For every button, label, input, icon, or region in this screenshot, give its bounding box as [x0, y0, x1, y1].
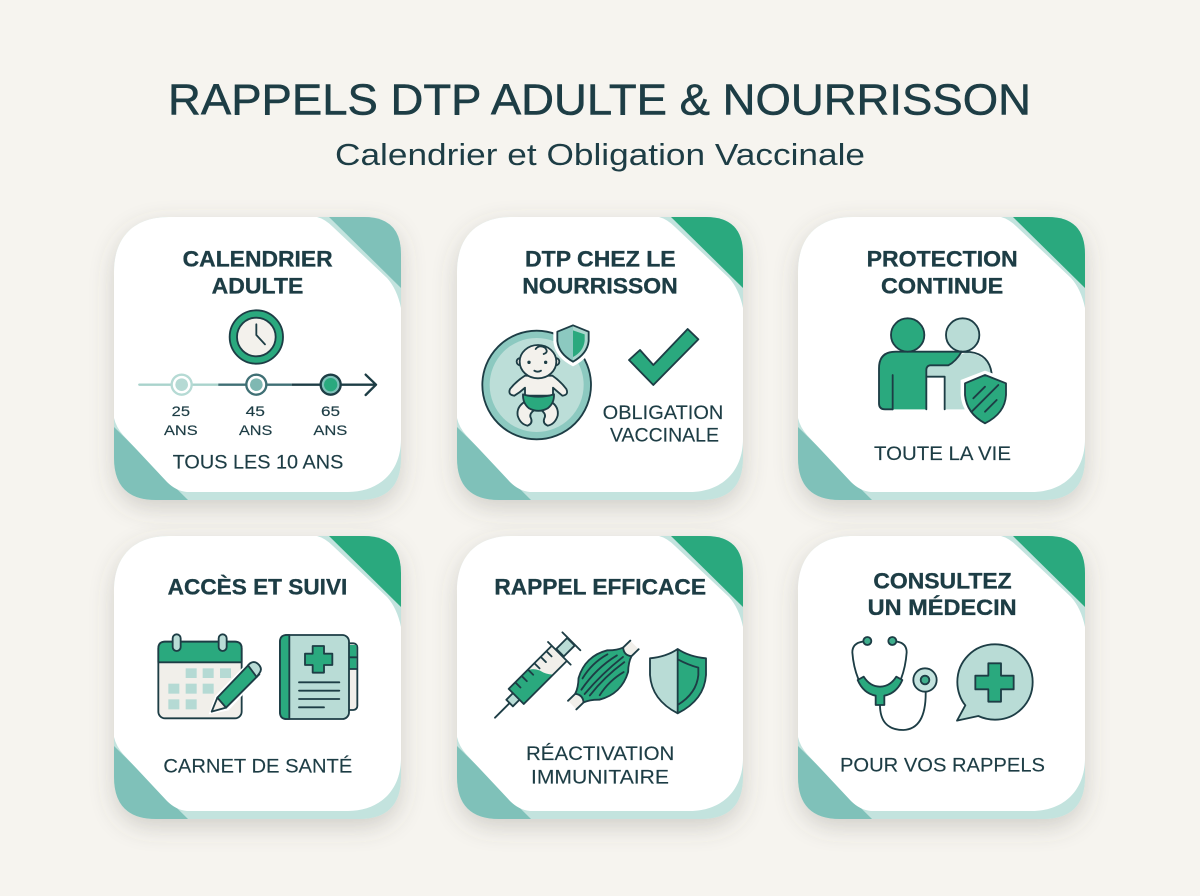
caption — [603, 403, 723, 447]
icon: check mark — [629, 329, 698, 385]
caption: POUR VOS RAPPELS — [840, 756, 1045, 777]
label: 25 ans: ANS — [164, 423, 198, 438]
caption: IMMUNITAIRE — [531, 767, 669, 788]
label: 45 ans: 45 — [246, 404, 265, 419]
icon: shield — [650, 649, 706, 713]
caption: CARNET DE SANTÉ — [163, 754, 352, 777]
panel: consultez un medecin — [798, 536, 1085, 819]
label: 65 ans — [313, 404, 347, 438]
heading: CONSULTEZ — [873, 568, 1012, 593]
heading: UN MÉDECIN — [868, 595, 1017, 620]
label: 45 ans — [239, 404, 272, 438]
card background — [457, 217, 743, 500]
icon: shield — [961, 371, 1010, 428]
heading — [522, 247, 678, 298]
heading: NOURRISSON — [522, 273, 678, 298]
icon: two people — [879, 318, 992, 409]
caption: RÉACTIVATION — [526, 742, 674, 765]
heading: PROTECTION — [867, 247, 1018, 272]
subtitle: Calendrier et Obligation Vaccinale — [335, 138, 865, 172]
panel: acces et suivi — [114, 536, 401, 819]
icon: stethoscope — [852, 637, 937, 730]
heading — [867, 247, 1018, 298]
panel: protection continue — [798, 217, 1085, 500]
label: 65 ans: ANS — [313, 423, 347, 438]
heading — [868, 568, 1017, 620]
heading: ADULTE — [212, 273, 303, 298]
title: RAPPELS DTP ADULTE & NOURRISSON — [168, 76, 1031, 124]
icon: syringe — [484, 630, 583, 729]
panel: rappel efficace — [457, 536, 743, 819]
heading: CALENDRIER — [183, 247, 333, 272]
heading: RAPPEL EFFICACE — [494, 574, 706, 599]
panel: calendrier adulte — [114, 217, 401, 500]
caption: OBLIGATION — [603, 403, 723, 424]
heading: DTP CHEZ LE — [525, 247, 676, 272]
icon: speech bubble with cross — [957, 644, 1033, 721]
icon: shield — [553, 321, 593, 366]
card background — [798, 217, 1085, 500]
icon: muscle — [558, 630, 649, 720]
heading — [183, 247, 333, 298]
card background — [114, 536, 401, 819]
card background — [114, 217, 401, 500]
icon: clock — [230, 310, 283, 364]
panel: dtp chez le nourrisson — [457, 217, 743, 500]
label: 45 ans: ANS — [239, 423, 272, 438]
heading: CONTINUE — [881, 273, 1003, 298]
card background — [798, 536, 1085, 819]
caption: TOUTE LA VIE — [874, 444, 1011, 465]
caption: VACCINALE — [610, 426, 719, 447]
icon: health record book — [280, 635, 357, 719]
timeline — [139, 375, 376, 395]
card background — [457, 536, 743, 819]
label: 25 ans: 25 — [172, 404, 190, 419]
label: 25 ans — [164, 404, 198, 438]
caption — [526, 742, 674, 788]
icon: calendar with pencil — [158, 634, 265, 718]
caption: TOUS LES 10 ANS — [173, 452, 343, 473]
icon: baby in circle — [482, 331, 591, 439]
heading: ACCÈS ET SUIVI — [168, 574, 347, 599]
label: 65 ans: 65 — [321, 404, 340, 419]
